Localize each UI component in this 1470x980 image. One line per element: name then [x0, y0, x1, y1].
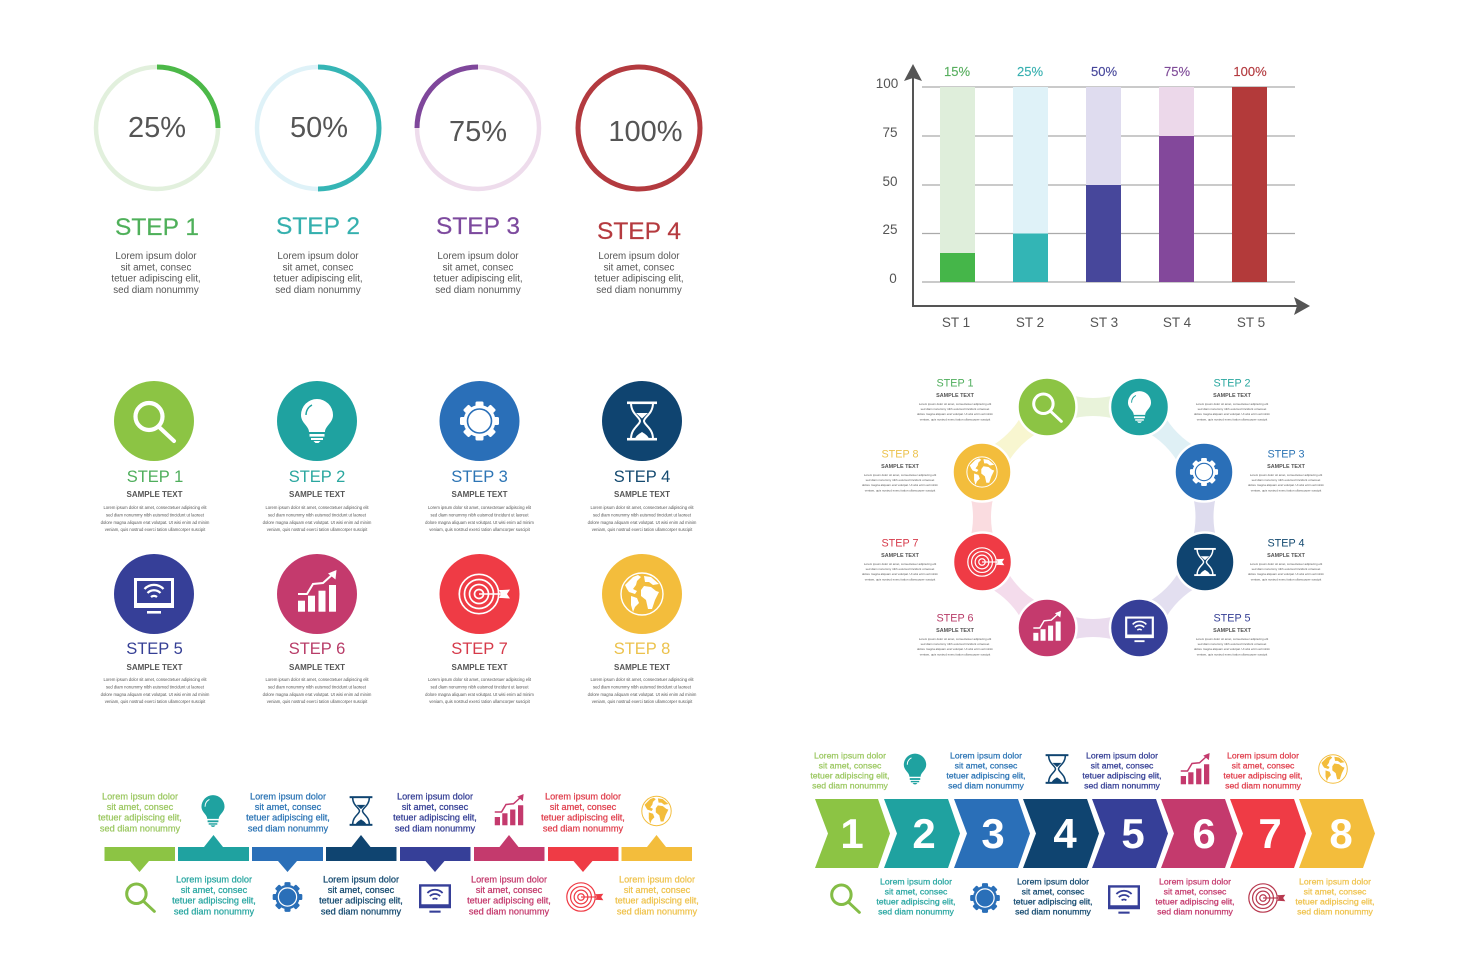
- grid step 4: [588, 381, 697, 532]
- ring label 3: veniam, quis nostrud exerci tation ullamcorper suscipit: [1251, 488, 1321, 492]
- ring label 8: sed diam nonummy nibh euismod tincidunt ut laoreet: [866, 478, 935, 482]
- axis labels: 50: [882, 174, 898, 189]
- grid step 3: veniam, quis nostrud exerci tation ullamcorper suscipit: [429, 527, 531, 532]
- progress ring: step 4: sit amet, consec: [604, 262, 674, 273]
- progress ring: step 1: STEP 1: [115, 214, 199, 241]
- progress ring: step 3: STEP 3: [436, 213, 520, 240]
- axis labels: 100: [876, 76, 898, 91]
- grid step 3: sed diam nonummy nibh euismod tincidunt ut laoreet: [430, 512, 529, 517]
- grid step 8: sed diam nonummy nibh euismod tincidunt ut laoreet: [593, 684, 692, 689]
- grid step 1: veniam, quis nostrud exerci tation ullamcorper suscipit: [105, 527, 206, 532]
- grid step 2: dolore magna aliquam erat volutpat. Ut wisi enim ad minim: [263, 520, 372, 525]
- ring label 7: [862, 538, 939, 581]
- icon: monitor: [1108, 885, 1140, 914]
- timeline segment 3: [252, 847, 323, 872]
- chevron text 1: tetuer adipiscing elit,: [810, 770, 890, 780]
- ring label 2: SAMPLE TEXT: [1213, 393, 1252, 399]
- timeline text 8: sed diam nonummy: [617, 906, 697, 916]
- grid step 7: SAMPLE TEXT: [451, 663, 508, 672]
- grid step 6: STEP 6: [289, 640, 345, 658]
- ring node 3: [1174, 442, 1234, 502]
- ring label 8: veniam, quis nostrud exerci tation ullamcorper suscipit: [865, 488, 935, 492]
- timeline text 5: tetuer adipiscing elit,: [393, 813, 477, 823]
- axis labels: 0: [889, 271, 897, 286]
- timeline text 4: sit amet, consec: [328, 885, 395, 895]
- grid step 1: [101, 381, 210, 532]
- icon: chart: [495, 794, 524, 825]
- chevron text 2: tetuer adipiscing elit,: [876, 896, 956, 906]
- ring node 4: [1176, 532, 1234, 592]
- grid step 8: dolore magna aliquam erat volutpat. Ut wisi enim ad minim: [588, 692, 697, 697]
- timeline segment 7: [548, 847, 618, 872]
- chevron text 5: sit amet, consec: [1091, 760, 1154, 770]
- ring label 7: dolore magna aliquam erat volutpat. Ut wisi enim ad minim: [862, 572, 939, 576]
- chevron text 2: sit amet, consec: [885, 886, 948, 896]
- ring label 4: dolore magna aliquam erat volutpat. Ut wisi enim ad minim: [1248, 572, 1325, 576]
- chevron text 1: sed diam nonummy: [812, 780, 889, 790]
- ring label 8: Lorem ipsum dolor sit amet, consectetuer adipiscing elit: [864, 473, 936, 477]
- progress ring: step 3: sit amet, consec: [443, 262, 513, 273]
- bar: ST 3: [1086, 87, 1121, 282]
- ring node 7: [953, 532, 1012, 592]
- ring label 1: veniam, quis nostrud exerci tation ullamcorper suscipit: [920, 417, 990, 421]
- timeline text 4: tetuer adipiscing elit,: [319, 896, 403, 906]
- panel: chevron process: [810, 750, 1375, 916]
- chevron text 5: tetuer adipiscing elit,: [1082, 770, 1162, 780]
- ring label 3: sed diam nonummy nibh euismod tincidunt ut laoreet: [1252, 478, 1321, 482]
- timeline text 6: tetuer adipiscing elit,: [467, 896, 551, 906]
- chevron text 2: sed diam nonummy: [878, 906, 955, 916]
- progress ring: step 1: sed diam nonummy: [113, 285, 199, 296]
- grid step 5: STEP 5: [126, 640, 183, 658]
- progress ring: step 4: tetuer adipiscing elit,: [594, 274, 684, 285]
- progress ring: step 2: 50%: [290, 112, 348, 144]
- grid step 6: Lorem ipsum dolor sit amet, consectetuer adipiscing elit: [265, 677, 369, 682]
- icon: target: [1249, 884, 1285, 912]
- timeline text 3: tetuer adipiscing elit,: [246, 813, 330, 823]
- chevron text 3: Lorem ipsum dolor: [950, 750, 1022, 760]
- ring label 4: sed diam nonummy nibh euismod tincidunt ut laoreet: [1252, 567, 1321, 571]
- timeline text 5: Lorem ipsum dolor: [397, 792, 473, 802]
- panel: timeline: [98, 792, 699, 916]
- chevron text 4: sit amet, consec: [1022, 886, 1085, 896]
- timeline text 2: tetuer adipiscing elit,: [172, 896, 256, 906]
- chevron text 5: Lorem ipsum dolor: [1086, 750, 1158, 760]
- timeline text 2: Lorem ipsum dolor: [176, 874, 252, 884]
- icon: gear: [273, 882, 302, 912]
- icon: bulb: [201, 795, 225, 827]
- grid step 5: SAMPLE TEXT: [126, 663, 183, 672]
- timeline text 3: sit amet, consec: [255, 802, 322, 812]
- ring label 7: sed diam nonummy nibh euismod tincidunt ut laoreet: [866, 567, 935, 571]
- grid step 7: Lorem ipsum dolor sit amet, consectetuer adipiscing elit: [428, 677, 532, 682]
- chevron 4: 4: [1053, 810, 1077, 857]
- progress ring: step 1: 25%: [128, 112, 186, 144]
- chevron text 3: sit amet, consec: [955, 760, 1018, 770]
- timeline text 6: sed diam nonummy: [469, 906, 549, 916]
- grid step 1: STEP 1: [127, 468, 183, 486]
- timeline text 8: Lorem ipsum dolor: [619, 874, 695, 884]
- axis labels: ST 2: [1016, 315, 1044, 330]
- chevron text 1: sit amet, consec: [819, 760, 882, 770]
- chevron text 8: tetuer adipiscing elit,: [1295, 896, 1375, 906]
- chevron text 6: sit amet, consec: [1164, 886, 1227, 896]
- progress ring: step 1: tetuer adipiscing elit,: [111, 274, 201, 285]
- ring label 3: SAMPLE TEXT: [1267, 464, 1306, 470]
- grid step 2: [263, 381, 372, 532]
- timeline text 7: sit amet, consec: [550, 802, 617, 812]
- ring label 6: Lorem ipsum dolor sit amet, consectetuer adipiscing elit: [919, 637, 991, 641]
- timeline text 7: sed diam nonummy: [543, 823, 623, 833]
- chevron text 3: tetuer adipiscing elit,: [946, 770, 1026, 780]
- timeline text 5: sit amet, consec: [402, 802, 469, 812]
- grid step 2: sed diam nonummy nibh euismod tincidunt ut laoreet: [268, 512, 367, 517]
- icon: hourglass: [350, 796, 372, 826]
- progress ring: step 4: [578, 67, 700, 296]
- ring label 2: sed diam nonummy nibh euismod tincidunt ut laoreet: [1198, 407, 1267, 411]
- progress ring: step 2: [257, 67, 379, 296]
- grid step 3: Lorem ipsum dolor sit amet, consectetuer adipiscing elit: [428, 505, 532, 510]
- ring label 4: veniam, quis nostrud exerci tation ullamcorper suscipit: [1251, 577, 1321, 581]
- grid step 4: sed diam nonummy nibh euismod tincidunt ut laoreet: [593, 512, 692, 517]
- ring label 2: dolore magna aliquam erat volutpat. Ut wisi enim ad minim: [1194, 412, 1271, 416]
- chevron 2: 2: [912, 810, 936, 857]
- grid step 6: veniam, quis nostrud exerci tation ullamcorper suscipit: [267, 699, 368, 704]
- grid step 1: sed diam nonummy nibh euismod tincidunt ut laoreet: [106, 512, 205, 517]
- ring label 5: sed diam nonummy nibh euismod tincidunt ut laoreet: [1198, 642, 1267, 646]
- grid step 6: dolore magna aliquam erat volutpat. Ut wisi enim ad minim: [263, 692, 372, 697]
- grid step 7: STEP 7: [451, 640, 508, 658]
- timeline segment 6: [474, 835, 544, 861]
- grid step 1: SAMPLE TEXT: [126, 490, 183, 499]
- ring label 4: [1248, 538, 1325, 581]
- timeline text 1: sed diam nonummy: [100, 823, 180, 833]
- ring label 2: Lorem ipsum dolor sit amet, consectetuer adipiscing elit: [1196, 402, 1268, 406]
- timeline segment 5: [400, 847, 470, 872]
- ring label 2: [1194, 378, 1271, 421]
- axis labels: ST 3: [1090, 315, 1118, 330]
- chevron text 1: Lorem ipsum dolor: [814, 750, 886, 760]
- ring label 3: STEP 3: [1267, 448, 1305, 460]
- ring label 1: STEP 1: [936, 378, 974, 390]
- grid step 8: [588, 554, 697, 704]
- icon: bulb: [904, 754, 926, 784]
- chevron 1: 1: [840, 810, 864, 857]
- timeline text 2: sed diam nonummy: [174, 906, 254, 916]
- grid step 3: [425, 381, 534, 532]
- progress ring: step 3: Lorem ipsum dolor: [437, 251, 519, 262]
- panel: circular process: [862, 378, 1325, 658]
- ring label 1: [917, 378, 994, 421]
- grid step 8: STEP 8: [614, 640, 670, 658]
- timeline text 1: Lorem ipsum dolor: [102, 792, 178, 802]
- progress ring: step 3: 75%: [449, 116, 507, 148]
- icon: globe: [642, 796, 671, 826]
- axis labels: ST 5: [1237, 315, 1265, 330]
- grid step 6: [263, 554, 372, 704]
- grid step 6: sed diam nonummy nibh euismod tincidunt ut laoreet: [268, 684, 367, 689]
- progress ring: step 2: STEP 2: [276, 213, 360, 240]
- chevron text 4: tetuer adipiscing elit,: [1013, 896, 1093, 906]
- chevron text 7: sed diam nonummy: [1225, 780, 1302, 790]
- ring label 6: sed diam nonummy nibh euismod tincidunt ut laoreet: [921, 642, 990, 646]
- grid step 1: dolore magna aliquam erat volutpat. Ut wisi enim ad minim: [101, 520, 210, 525]
- grid step 2: Lorem ipsum dolor sit amet, consectetuer adipiscing elit: [265, 505, 369, 510]
- chevron 5: [1092, 799, 1168, 868]
- progress ring: step 4: Lorem ipsum dolor: [598, 251, 680, 262]
- ring label 3: dolore magna aliquam erat volutpat. Ut wisi enim ad minim: [1248, 483, 1325, 487]
- grid step 3: dolore magna aliquam erat volutpat. Ut wisi enim ad minim: [425, 520, 534, 525]
- percent labels: 100%: [1233, 64, 1267, 79]
- grid step 5: sed diam nonummy nibh euismod tincidunt ut laoreet: [106, 684, 205, 689]
- ring label 3: Lorem ipsum dolor sit amet, consectetuer adipiscing elit: [1250, 473, 1322, 477]
- chevron 6: [1161, 799, 1237, 868]
- icon: target: [567, 883, 603, 911]
- grid step 5: Lorem ipsum dolor sit amet, consectetuer adipiscing elit: [103, 677, 207, 682]
- progress ring: step 2: sit amet, consec: [283, 262, 353, 273]
- ring label 7: Lorem ipsum dolor sit amet, consectetuer adipiscing elit: [864, 562, 936, 566]
- icon: chart: [1181, 753, 1210, 784]
- ring label 7: veniam, quis nostrud exerci tation ullamcorper suscipit: [865, 577, 935, 581]
- ring label 8: SAMPLE TEXT: [881, 464, 920, 470]
- grid step 5: dolore magna aliquam erat volutpat. Ut wisi enim ad minim: [101, 692, 210, 697]
- ring label 6: dolore magna aliquam erat volutpat. Ut wisi enim ad minim: [917, 647, 994, 651]
- ring label 8: STEP 8: [881, 448, 919, 460]
- grid step 3: SAMPLE TEXT: [451, 490, 508, 499]
- chevron text 8: sit amet, consec: [1304, 886, 1367, 896]
- chevron 1: [815, 799, 890, 868]
- bar: ST 2: [1013, 87, 1048, 282]
- chevron 4: [1023, 799, 1099, 868]
- ring label 8: [862, 448, 939, 492]
- chevron 6: 6: [1192, 810, 1216, 857]
- ring node 8: [952, 442, 1012, 502]
- ring label 5: Lorem ipsum dolor sit amet, consectetuer adipiscing elit: [1196, 637, 1268, 641]
- grid step 4: veniam, quis nostrud exerci tation ullamcorper suscipit: [592, 527, 693, 532]
- progress ring: step 1: Lorem ipsum dolor: [115, 251, 197, 262]
- timeline segment 2: [178, 835, 249, 861]
- axis labels: [876, 76, 1265, 330]
- chevron 2: [884, 799, 960, 868]
- ring label 5: [1194, 612, 1271, 656]
- chevron text 8: Lorem ipsum dolor: [1299, 876, 1371, 886]
- grid step 2: veniam, quis nostrud exerci tation ullamcorper suscipit: [267, 527, 368, 532]
- percent labels: 15%: [944, 64, 970, 79]
- timeline segment 4: [326, 835, 396, 861]
- timeline text 7: tetuer adipiscing elit,: [541, 813, 625, 823]
- timeline text 7: Lorem ipsum dolor: [545, 792, 621, 802]
- grid step 4: SAMPLE TEXT: [614, 490, 670, 499]
- ring label 3: [1248, 448, 1325, 492]
- grid step 7: dolore magna aliquam erat volutpat. Ut wisi enim ad minim: [425, 692, 534, 697]
- progress ring: step 4: 100%: [608, 116, 683, 148]
- timeline segment 8: [622, 835, 692, 861]
- grid step 5: [101, 554, 210, 704]
- ring node 1: [1018, 378, 1076, 436]
- timeline text 3: sed diam nonummy: [248, 823, 328, 833]
- grid step 5: veniam, quis nostrud exerci tation ullamcorper suscipit: [105, 699, 206, 704]
- icon: gear: [970, 883, 1000, 913]
- icon: search: [832, 885, 859, 912]
- grid step 8: SAMPLE TEXT: [614, 663, 670, 672]
- ring label 1: dolore magna aliquam erat volutpat. Ut wisi enim ad minim: [917, 412, 994, 416]
- timeline text 6: sit amet, consec: [476, 885, 543, 895]
- ring label 6: veniam, quis nostrud exerci tation ullamcorper suscipit: [920, 652, 990, 656]
- ring label 6: STEP 6: [936, 612, 974, 624]
- grid step 4: dolore magna aliquam erat volutpat. Ut wisi enim ad minim: [588, 520, 697, 525]
- grid step 8: veniam, quis nostrud exerci tation ullamcorper suscipit: [592, 699, 693, 704]
- progress ring: step 2: Lorem ipsum dolor: [277, 251, 359, 262]
- ring node 6: [1018, 598, 1076, 658]
- timeline text 4: sed diam nonummy: [321, 906, 401, 916]
- progress ring: step 2: tetuer adipiscing elit,: [273, 274, 363, 285]
- chevron text 2: Lorem ipsum dolor: [880, 876, 952, 886]
- bar chart: [876, 64, 1310, 330]
- percent labels: 75%: [1164, 64, 1190, 79]
- timeline text 1: tetuer adipiscing elit,: [98, 813, 182, 823]
- timeline text 3: Lorem ipsum dolor: [250, 792, 326, 802]
- ring label 4: SAMPLE TEXT: [1267, 553, 1306, 559]
- axis labels: ST 4: [1163, 315, 1192, 330]
- axis labels: 75: [882, 125, 898, 140]
- timeline text 5: sed diam nonummy: [395, 823, 475, 833]
- chevron text 3: sed diam nonummy: [948, 780, 1025, 790]
- chevron text 6: Lorem ipsum dolor: [1159, 876, 1231, 886]
- timeline segment 1: [104, 847, 175, 872]
- chevron 7: [1230, 799, 1306, 868]
- icon: globe: [1319, 755, 1347, 783]
- progress ring: step 1: sit amet, consec: [121, 262, 191, 273]
- grid step 8: Lorem ipsum dolor sit amet, consectetuer adipiscing elit: [590, 677, 694, 682]
- bar: ST 1: [940, 87, 975, 282]
- grid step 2: SAMPLE TEXT: [289, 490, 345, 499]
- grid step 4: Lorem ipsum dolor sit amet, consectetuer adipiscing elit: [590, 505, 694, 510]
- bar: ST 4: [1159, 87, 1194, 282]
- ring label 5: STEP 5: [1213, 612, 1251, 624]
- ring label 5: veniam, quis nostrud exerci tation ullamcorper suscipit: [1197, 652, 1267, 656]
- progress ring: step 2: sed diam nonummy: [275, 285, 361, 296]
- ring label 5: SAMPLE TEXT: [1213, 628, 1252, 634]
- grid step 3: STEP 3: [451, 468, 508, 486]
- progress ring: step 3: tetuer adipiscing elit,: [433, 274, 523, 285]
- chevron 5: 5: [1121, 810, 1145, 857]
- icon: hourglass: [1046, 754, 1068, 784]
- grid step 6: SAMPLE TEXT: [289, 663, 345, 672]
- axis labels: ST 1: [942, 315, 970, 330]
- chevron 3: [954, 799, 1030, 868]
- ring label 7: STEP 7: [881, 538, 919, 550]
- timeline text 4: Lorem ipsum dolor: [323, 874, 399, 884]
- icon: search: [127, 884, 154, 911]
- chevron 8: [1299, 799, 1375, 868]
- ring label 8: dolore magna aliquam erat volutpat. Ut wisi enim ad minim: [862, 483, 939, 487]
- chevron text 7: Lorem ipsum dolor: [1227, 750, 1299, 760]
- timeline text 1: sit amet, consec: [107, 802, 174, 812]
- grid step 4: STEP 4: [614, 468, 670, 486]
- ring label 2: veniam, quis nostrud exerci tation ullamcorper suscipit: [1197, 417, 1267, 421]
- timeline text 2: sit amet, consec: [181, 885, 248, 895]
- panel: icon step grid: [101, 381, 697, 704]
- grid step 7: sed diam nonummy nibh euismod tincidunt ut laoreet: [430, 684, 529, 689]
- grid step 2: STEP 2: [289, 468, 345, 486]
- chevron 8: 8: [1329, 810, 1353, 857]
- progress ring: step 3: [417, 67, 539, 296]
- timeline text 6: Lorem ipsum dolor: [471, 874, 547, 884]
- icon: monitor: [419, 884, 451, 913]
- chevron text 8: sed diam nonummy: [1297, 906, 1374, 916]
- chevron text 4: sed diam nonummy: [1015, 906, 1092, 916]
- grid step 7: veniam, quis nostrud exerci tation ullamcorper suscipit: [429, 699, 531, 704]
- timeline text 8: sit amet, consec: [624, 885, 691, 895]
- percent labels: 50%: [1091, 64, 1117, 79]
- chevron 3: 3: [981, 810, 1005, 857]
- ring label 4: STEP 4: [1267, 538, 1305, 550]
- progress ring: step 4: STEP 4: [597, 218, 681, 245]
- ring label 7: SAMPLE TEXT: [881, 553, 920, 559]
- chevron text 7: tetuer adipiscing elit,: [1223, 770, 1303, 780]
- ring label 6: SAMPLE TEXT: [936, 628, 975, 634]
- ring label 1: SAMPLE TEXT: [936, 393, 975, 399]
- chevron text 5: sed diam nonummy: [1084, 780, 1161, 790]
- chevron text 6: tetuer adipiscing elit,: [1155, 896, 1235, 906]
- arrow: chart axes: [904, 64, 1310, 315]
- ring label 6: [917, 612, 994, 656]
- grid step 1: Lorem ipsum dolor sit amet, consectetuer adipiscing elit: [103, 505, 207, 510]
- chevron text 6: sed diam nonummy: [1157, 906, 1234, 916]
- progress ring: step 1: [96, 67, 218, 296]
- percent labels: [944, 64, 1267, 79]
- progress ring: step 3: sed diam nonummy: [435, 285, 521, 296]
- chevron 7: 7: [1258, 810, 1282, 857]
- chevron text 4: Lorem ipsum dolor: [1017, 876, 1089, 886]
- grid step 7: [425, 554, 534, 704]
- progress ring: step 4: sed diam nonummy: [596, 285, 682, 296]
- ring label 1: sed diam nonummy nibh euismod tincidunt ut laoreet: [921, 407, 990, 411]
- ring label 2: STEP 2: [1213, 378, 1251, 390]
- ring node 2: [1110, 378, 1169, 436]
- ring label 1: Lorem ipsum dolor sit amet, consectetuer adipiscing elit: [919, 402, 991, 406]
- chevron text 7: sit amet, consec: [1232, 760, 1295, 770]
- axis labels: 25: [882, 222, 898, 237]
- percent labels: 25%: [1017, 64, 1043, 79]
- timeline text 8: tetuer adipiscing elit,: [615, 896, 699, 906]
- ring label 4: Lorem ipsum dolor sit amet, consectetuer adipiscing elit: [1250, 562, 1322, 566]
- bar: ST 5: [1232, 87, 1267, 282]
- panel: progress rings: [96, 67, 700, 296]
- ring node 5: [1110, 598, 1169, 658]
- ring label 5: dolore magna aliquam erat volutpat. Ut wisi enim ad minim: [1194, 647, 1271, 651]
